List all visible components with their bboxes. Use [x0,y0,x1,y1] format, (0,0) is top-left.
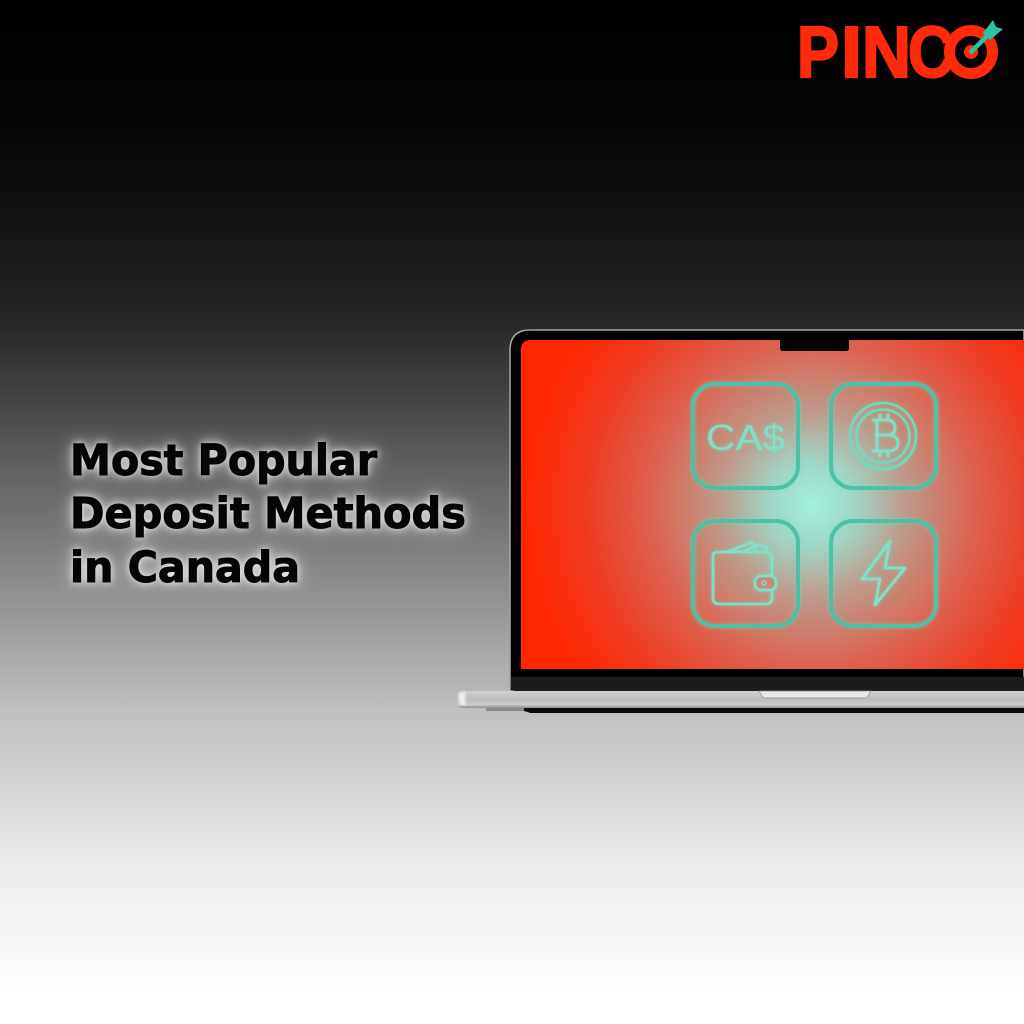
trackpad notch [759,691,871,698]
notch [780,340,849,351]
title: in Canada [70,543,300,593]
icon: bitcoin card [831,384,936,488]
icon: wallet card [693,521,798,626]
laptop lid frame [510,330,1024,691]
icon: lightning card [831,521,936,626]
logo: PINCO [797,13,1003,93]
laptop chin [511,677,1024,691]
logo: PINCO: N [862,13,911,93]
icon: CA$ card [693,384,798,488]
logo: PINCO: C [908,13,954,93]
title [70,436,466,593]
icon grid [693,384,936,626]
base left highlight [459,692,466,705]
base underside [522,708,1024,713]
screen glow [521,340,1024,669]
title: Deposit Methods [70,489,466,539]
icon: CA$ card: CA$ [706,417,785,458]
laptop base [457,691,1024,708]
laptop [457,330,1024,713]
laptop screen [521,340,1024,669]
icon: target O with arrow [950,20,1003,74]
foot [486,708,524,711]
title: Most Popular [70,436,378,486]
logo: PINCO: I [841,13,862,93]
logo: PINCO: P [797,13,839,93]
